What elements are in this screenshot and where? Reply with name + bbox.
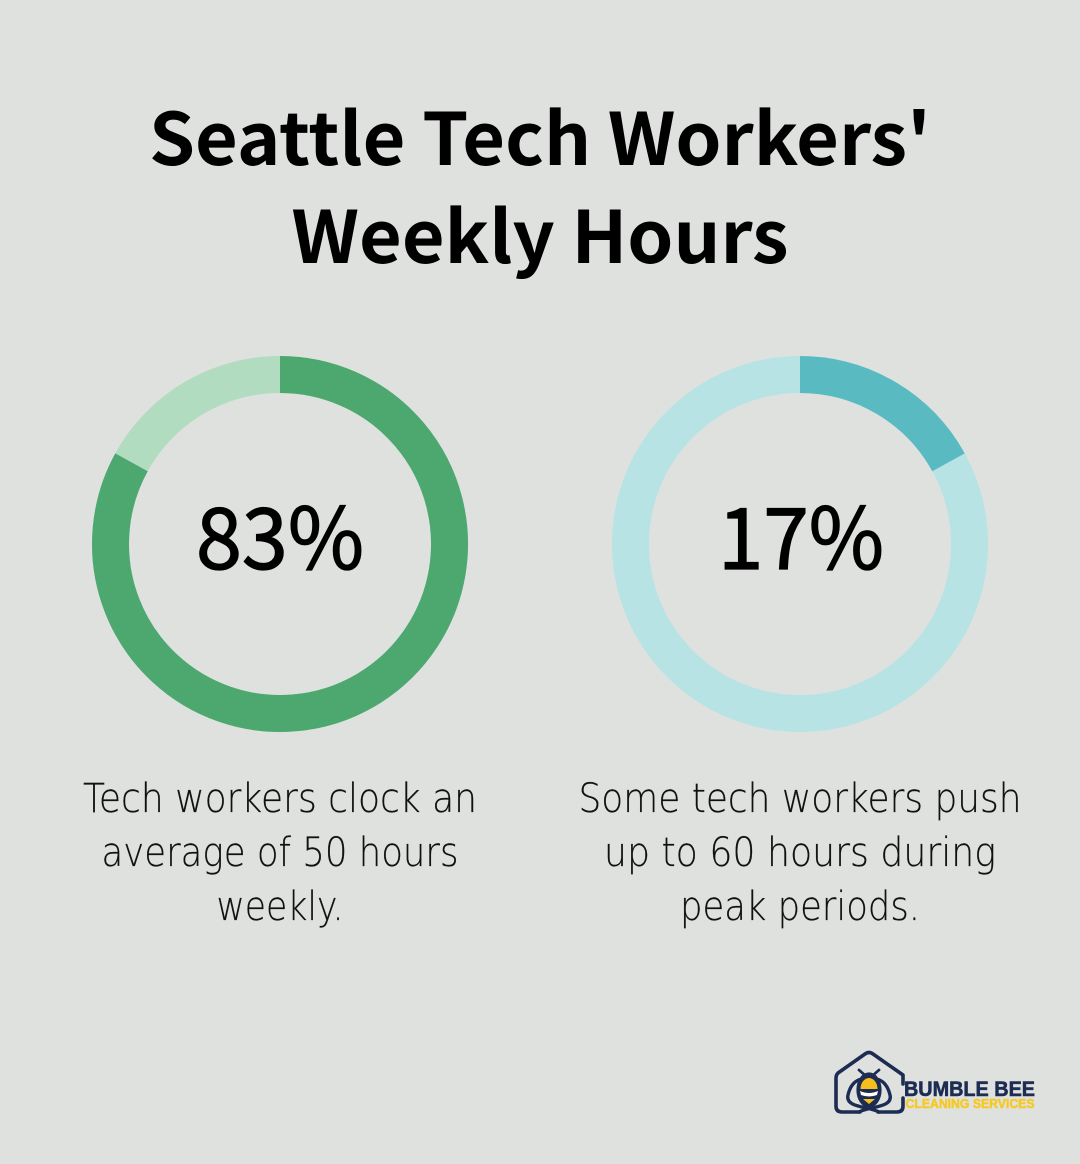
icon: house with bee: [836, 1052, 903, 1112]
description: 17%: peak periods.: [680, 884, 920, 930]
description: 17%: up to 60 hours during: [604, 830, 996, 876]
title: Weekly Hours: [292, 179, 788, 284]
title: Seattle Tech Workers': [149, 81, 931, 186]
panel: 83 percent: [83, 374, 477, 930]
logo wordmark: BUMBLE BEE: [904, 1078, 1035, 1101]
description: 83%: weekly.: [216, 884, 344, 930]
description: 17%: [578, 776, 1022, 930]
panel: 17 percent: [578, 374, 1022, 930]
title: [149, 81, 931, 284]
description: 83%: [83, 776, 477, 930]
donut chart: 17%: [630, 374, 970, 714]
description: 17%: Some tech workers push: [578, 776, 1022, 822]
donut chart: 83%: [110, 374, 450, 714]
description: 83%: Tech workers clock an: [83, 776, 477, 822]
description: 83%: average of 50 hours: [102, 830, 458, 876]
logo: Bumble Bee Cleaning Services: [836, 1052, 1035, 1112]
value: 17%: 17%: [718, 471, 884, 594]
logo tagline: CLEANING SERVICES: [906, 1097, 1034, 1111]
value: 83%: 83%: [196, 471, 364, 594]
